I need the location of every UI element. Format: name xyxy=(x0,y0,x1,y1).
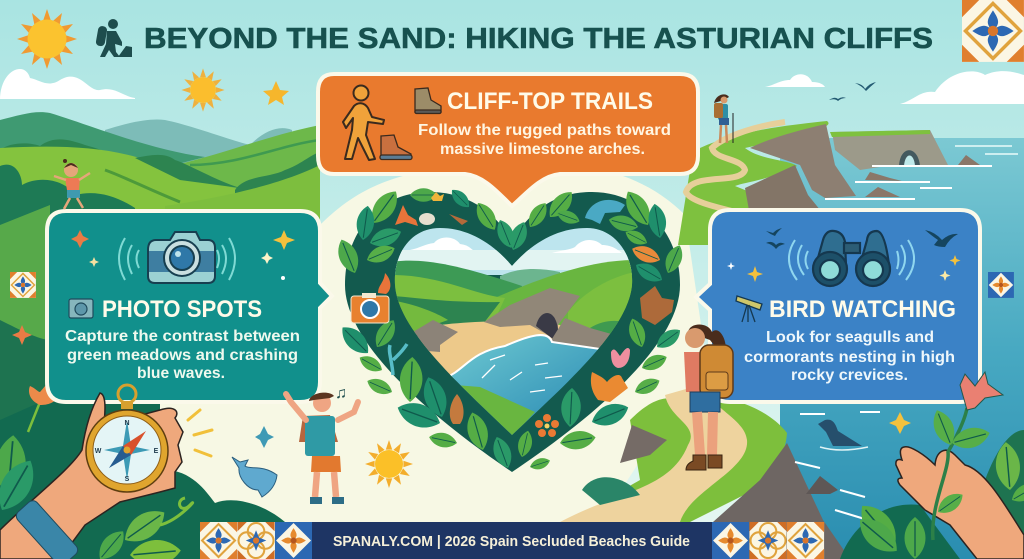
panel: bird watching xyxy=(696,210,980,402)
heading: BIRD WATCHING xyxy=(769,296,956,323)
body text: rocky crevices. xyxy=(791,367,908,384)
body text: massive limestone arches. xyxy=(440,141,645,158)
icon: sun top left xyxy=(17,9,77,69)
wreath leaves xyxy=(333,186,687,472)
icon: pink tulip xyxy=(611,348,630,368)
body text: cormorants nesting in high xyxy=(744,349,955,366)
icon: yellow dashes xyxy=(188,410,212,456)
body text: blue waves. xyxy=(137,365,225,382)
icon: shell and leaf decorations xyxy=(378,192,468,294)
icon: small camera xyxy=(69,299,93,318)
icon: birds xyxy=(766,228,958,249)
lower right land xyxy=(590,398,787,522)
icon: compass in hand xyxy=(0,385,183,559)
icon: star xyxy=(263,81,289,105)
icon: boot upper xyxy=(415,88,441,114)
small hiker top xyxy=(714,94,733,143)
icon: seal bird in sea xyxy=(818,420,868,450)
body text: Capture the contrast between xyxy=(65,328,300,345)
footer tiles left xyxy=(200,522,312,559)
body text xyxy=(65,328,300,382)
icon: pine cone xyxy=(450,394,464,424)
icon: bottom sun xyxy=(365,440,413,488)
left tile xyxy=(10,272,36,298)
title: BEYOND THE SAND: HIKING THE ASTURIAN CLIFFS xyxy=(144,23,933,55)
birds top right xyxy=(829,82,876,101)
icon: compass in hand: E xyxy=(154,448,159,455)
body text: Look for seagulls and xyxy=(766,329,934,346)
icon: gold sparkle xyxy=(889,412,911,434)
icon: walking person xyxy=(343,86,384,160)
lower left foliage xyxy=(0,434,28,496)
heart leaf wreath xyxy=(333,186,687,472)
icon: orange flower xyxy=(591,372,628,402)
icon: compass in hand: S xyxy=(125,476,130,483)
icon: compass in hand: W xyxy=(95,448,102,455)
panel: photo spots xyxy=(47,211,332,402)
body text: green meadows and crashing xyxy=(67,347,298,364)
icon: camera on wreath xyxy=(351,293,389,323)
icon: dolphin xyxy=(232,457,277,497)
icon: sparkles xyxy=(727,255,960,282)
panel: cliff-top trails xyxy=(318,74,698,206)
right grass and path xyxy=(678,121,829,245)
cream center xyxy=(150,172,712,522)
icon: tile top right xyxy=(962,0,1024,62)
heart scene xyxy=(390,225,635,440)
icon: small sun xyxy=(181,68,225,112)
icon: small orange flower xyxy=(535,414,559,437)
icon: hiker xyxy=(95,19,132,57)
icon: music note: ♫ xyxy=(335,385,347,402)
footer bar xyxy=(312,522,712,559)
body text: Follow the rugged paths toward xyxy=(418,122,671,139)
icon: hand with flower xyxy=(896,372,1024,559)
icon: brown rock xyxy=(640,286,674,325)
icon: boot lower xyxy=(380,135,412,160)
icon: blue sparkle xyxy=(255,426,274,448)
icon: waves xyxy=(789,240,914,280)
icon: compass in hand: N xyxy=(124,420,130,427)
icon: camera xyxy=(148,232,215,283)
icon: orange flower left xyxy=(28,385,60,432)
left sparkle xyxy=(12,325,32,345)
icon: sparkles xyxy=(71,230,295,280)
footer bar: SPANALY.COM | 2026 Spain Secluded Beaches Guide xyxy=(333,533,690,550)
hiker with backpack xyxy=(684,324,733,470)
icon: waves xyxy=(119,238,235,280)
icon: telescope xyxy=(736,296,762,322)
lower right foliage xyxy=(840,504,960,559)
boy with raised arms xyxy=(286,393,358,504)
child waving xyxy=(54,159,90,209)
footer tiles right xyxy=(712,522,824,559)
icon: orange flower upper left xyxy=(395,205,418,226)
body text xyxy=(418,122,671,158)
body text xyxy=(744,329,955,384)
right tile xyxy=(988,272,1014,298)
heading: PHOTO SPOTS xyxy=(102,296,262,323)
icon: coral xyxy=(389,344,407,375)
heading: CLIFF-TOP TRAILS xyxy=(447,88,653,115)
icon: binoculars xyxy=(813,231,890,286)
icon: dolphin on wreath xyxy=(585,200,625,224)
